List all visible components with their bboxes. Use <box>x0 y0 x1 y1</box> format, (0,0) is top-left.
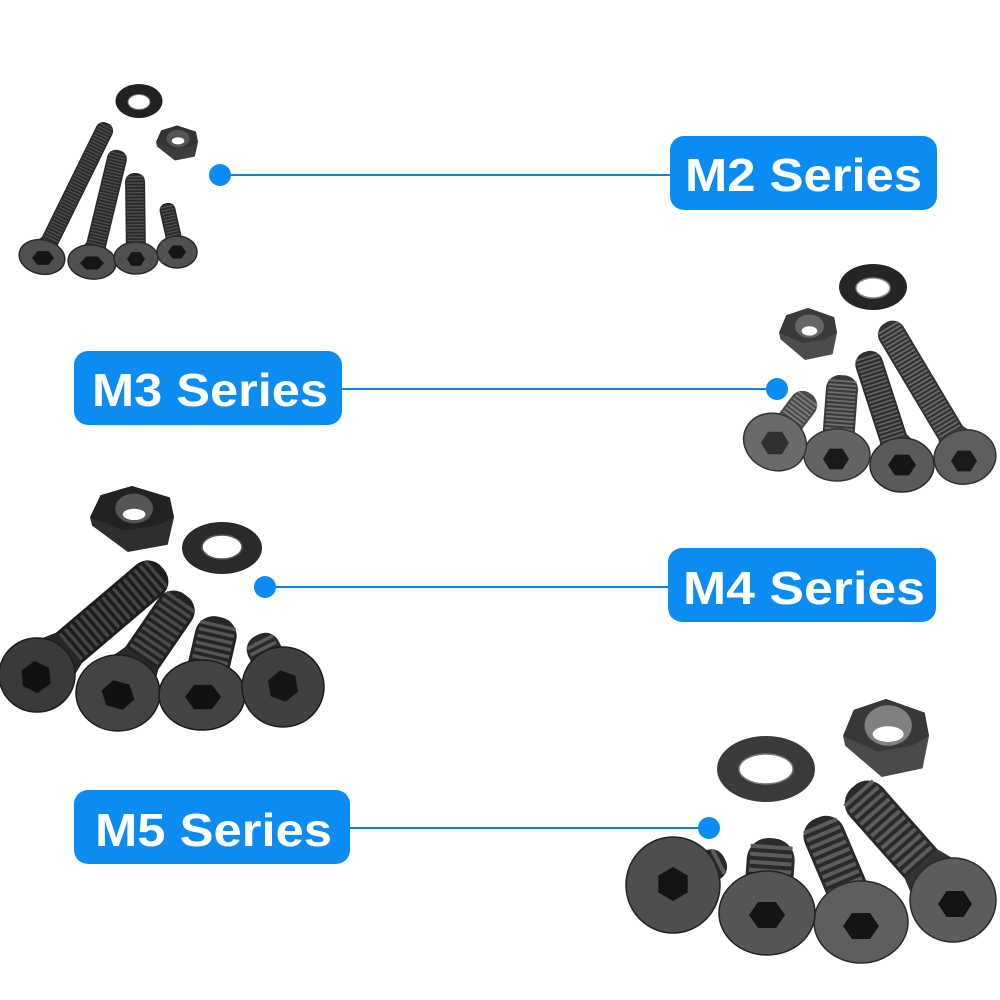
group: M3 series hardware <box>734 264 1000 492</box>
label: M2 Series <box>670 136 937 210</box>
icon: M2 short screw <box>114 173 158 274</box>
label: M5 Series <box>74 790 350 864</box>
icon: M2 long screw <box>16 115 124 278</box>
icon: M3 washer <box>839 264 907 310</box>
icon: M4 nut <box>90 486 174 552</box>
icon: M5 short screw <box>719 837 815 955</box>
icon: M3 short screw <box>734 386 822 481</box>
icon: M2 shortest screw <box>157 201 197 268</box>
label: M3 Series: M3 Series <box>92 364 328 416</box>
group: M5 series hardware <box>626 699 996 963</box>
icon: M2 medium screw <box>66 146 138 281</box>
connector: M2 <box>209 164 672 186</box>
icon: M3 long screw <box>839 343 934 492</box>
icon: M3 nut <box>779 308 837 360</box>
connector: M4 <box>254 576 670 598</box>
connector: M5 <box>348 817 720 839</box>
icon: M4 long screw <box>0 542 185 712</box>
group: M2 series hardware <box>16 84 198 281</box>
icon: M5 long screw <box>824 762 996 942</box>
label: M2 Series: M2 Series <box>685 149 922 201</box>
label: M3 Series <box>74 351 342 425</box>
group: M4 series hardware <box>0 486 324 731</box>
label: M4 Series: M4 Series <box>683 562 925 614</box>
icon: M4 short screw <box>159 612 245 730</box>
icon: M3 medium screw <box>804 374 870 481</box>
label: M4 Series <box>668 548 936 622</box>
icon: M2 nut <box>156 126 198 160</box>
icon: M5 washer <box>717 736 815 802</box>
icon: M2 washer <box>116 84 162 118</box>
icon: M5 nut <box>843 699 929 777</box>
icon: M4 medium screw <box>76 574 215 731</box>
label: M5 Series: M5 Series <box>95 804 332 856</box>
icon: M3 longest screw <box>862 309 1000 490</box>
icon: M4 washer <box>182 522 262 574</box>
icon: M5 shortest screw <box>626 837 732 933</box>
connector: M3 <box>340 378 788 400</box>
icon: M5 medium screw <box>798 810 908 963</box>
icon: M4 shortest screw <box>242 628 324 727</box>
